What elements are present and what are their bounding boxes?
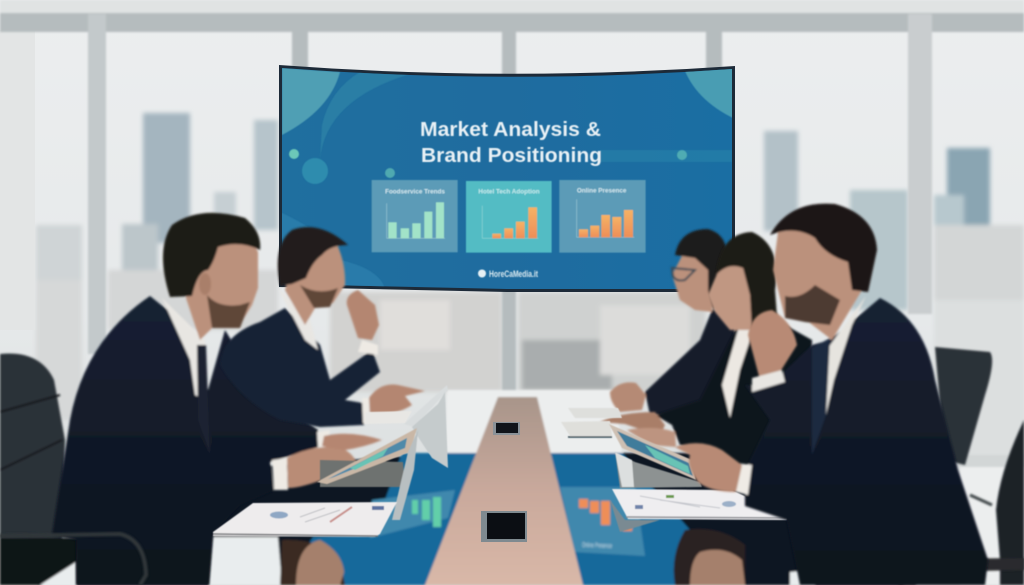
chart card: Online Presence bbox=[559, 180, 646, 253]
cuff bbox=[736, 463, 752, 495]
shirt collar bbox=[825, 296, 866, 415]
beard bbox=[207, 295, 250, 328]
jacket bbox=[220, 308, 380, 427]
person: woman front bbox=[600, 232, 812, 470]
beard bbox=[785, 285, 840, 325]
face bbox=[285, 240, 345, 325]
screen decorative shapes bbox=[282, 68, 340, 135]
chair left bbox=[0, 354, 65, 540]
hand at chin bbox=[748, 310, 797, 380]
tablet front bbox=[320, 460, 405, 487]
paper and tablet right bbox=[561, 408, 787, 532]
pointing hand bbox=[369, 385, 425, 415]
paper stack bbox=[365, 411, 412, 424]
reflection of man's face bbox=[280, 540, 345, 585]
shirt collar bbox=[162, 298, 205, 400]
document bbox=[612, 489, 787, 520]
presentation screen bbox=[279, 60, 735, 295]
table white far surface bbox=[445, 390, 622, 453]
shirt bbox=[278, 288, 318, 350]
reflected chart cards bbox=[370, 490, 455, 538]
person: woman rear bbox=[610, 229, 735, 420]
screen title: Brand Positioning bbox=[421, 145, 602, 167]
table consoles bbox=[481, 422, 527, 542]
white window reflection bbox=[40, 537, 282, 585]
chart card: Foodservice Trends: Foodservice Trends bbox=[385, 188, 445, 195]
chart card: Hotel Tech Adoption bbox=[466, 181, 552, 253]
tablet stand bbox=[615, 452, 702, 488]
clasped hands bbox=[610, 382, 646, 412]
ear bbox=[199, 273, 211, 295]
screen title: Market Analysis & bbox=[420, 119, 601, 141]
person: man far left bbox=[52, 213, 382, 585]
skyline buildings bbox=[36, 113, 1024, 455]
conference table bbox=[38, 390, 905, 585]
raised hand bbox=[347, 290, 379, 340]
jacket bbox=[52, 296, 318, 585]
jacket bbox=[745, 298, 988, 585]
hair bbox=[278, 227, 348, 286]
neck and face bbox=[773, 225, 862, 340]
chair right back bbox=[935, 347, 992, 465]
chart card: Hotel Tech Adoption: Hotel Tech Adoption bbox=[478, 188, 540, 195]
dark glass table bbox=[38, 453, 905, 585]
chairs bbox=[0, 347, 1024, 585]
chair far right bbox=[996, 420, 1024, 560]
conference table: Online Presence bbox=[582, 542, 612, 550]
papers far bbox=[568, 408, 622, 418]
pointing hand bbox=[675, 443, 742, 492]
center wood strip bbox=[425, 397, 583, 585]
screen logo: HoreCaMedia.it bbox=[489, 269, 538, 279]
reflection of screen bbox=[282, 453, 690, 585]
hair bbox=[770, 204, 877, 292]
reflected tablet bbox=[610, 500, 660, 532]
chair arm left bbox=[0, 534, 1024, 585]
chart card: Online Presence: Online Presence bbox=[577, 188, 627, 195]
screen title bbox=[420, 119, 602, 167]
screen logo bbox=[478, 269, 538, 279]
left wall column bbox=[0, 30, 35, 330]
person: second man bbox=[220, 227, 425, 427]
tablet back bbox=[404, 385, 448, 427]
person: man right bbox=[675, 204, 988, 585]
tablet bbox=[609, 424, 696, 480]
chart card: Foodservice Trends bbox=[372, 180, 458, 252]
document bbox=[213, 502, 397, 537]
hair bbox=[163, 213, 260, 297]
hands bbox=[600, 412, 665, 436]
neck and face bbox=[186, 228, 258, 340]
papers and tablets left bbox=[213, 385, 448, 537]
cuffs and hands bbox=[272, 430, 330, 490]
